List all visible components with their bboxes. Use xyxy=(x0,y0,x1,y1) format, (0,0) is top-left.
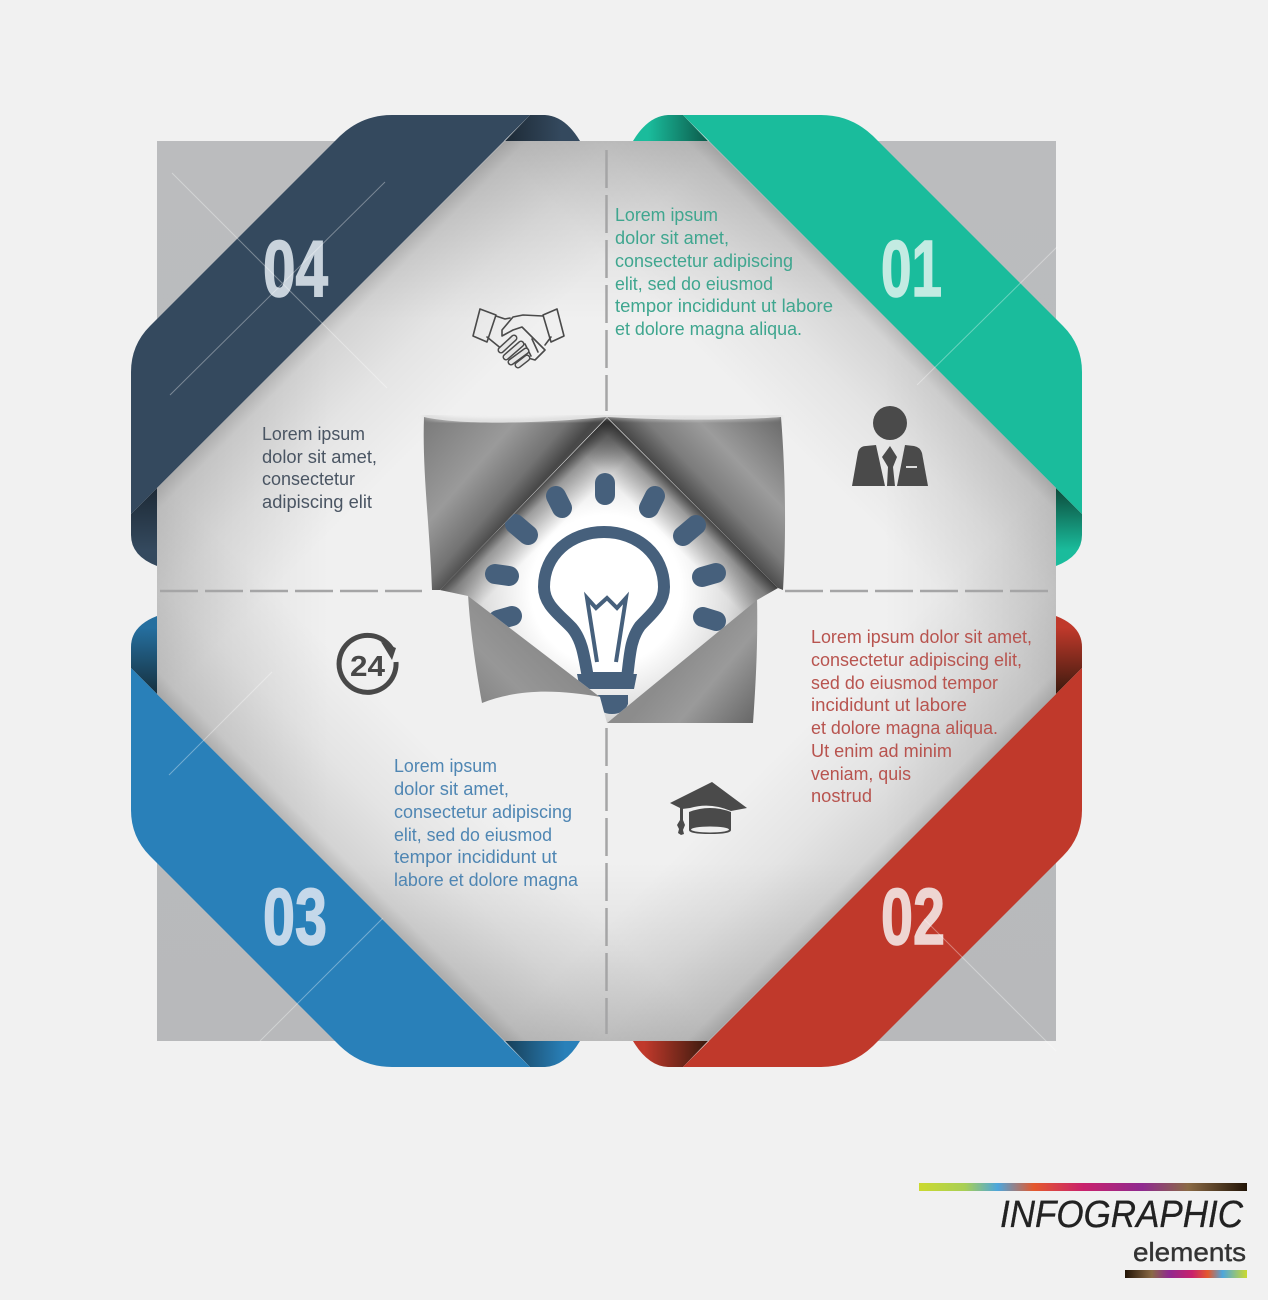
grey square backing xyxy=(157,141,1056,1041)
text block 03 blue: Lorem ipsum xyxy=(394,756,497,776)
ribbon 01 teal xyxy=(633,115,1082,566)
torn flap bottom right xyxy=(607,596,757,723)
icon: 24 hour clock xyxy=(339,635,396,692)
torn flap bottom left xyxy=(468,594,600,703)
dashed dividers xyxy=(160,150,1048,1034)
text block 02 red: nostrud xyxy=(811,786,872,806)
text block 01 teal: consectetur adipiscing xyxy=(615,251,793,271)
torn flap top right xyxy=(607,417,785,590)
text block 02 red: incididunt ut labore xyxy=(811,695,967,715)
text block 01 teal: elit, sed do eiusmod xyxy=(615,274,773,294)
subtitle elements: elements xyxy=(1133,1237,1246,1267)
faint diagonal hairlines xyxy=(169,173,1057,1051)
icon: handshake xyxy=(473,309,564,365)
text block 01 teal: et dolore magna aliqua. xyxy=(615,319,802,339)
text block 02 red: sed do eiusmod tempor xyxy=(811,673,998,693)
ribbon 02 red xyxy=(633,616,1082,1067)
ribbon 03 blue xyxy=(131,616,580,1067)
infographic canvas xyxy=(131,115,1247,1278)
text block 03 blue: consectetur adipiscing xyxy=(394,802,572,822)
icon: 24 hour clock: 24 xyxy=(350,651,385,683)
text block 03 blue: labore et dolore magna xyxy=(394,870,579,890)
text block 04 navy: Lorem ipsum xyxy=(262,424,365,444)
icon: graduation cap xyxy=(670,782,747,835)
central torn hole with light bulb xyxy=(424,410,790,730)
gradient bar bottom xyxy=(1125,1270,1247,1278)
ribbon 04 navy xyxy=(131,115,580,566)
icon: businessman xyxy=(852,406,928,486)
inner diamond xyxy=(440,418,778,723)
number 02: 02 xyxy=(881,872,945,961)
text block 04 navy: consectetur xyxy=(262,469,355,489)
text block 02 red: consectetur adipiscing elit, xyxy=(811,650,1022,670)
text block 02 red: Lorem ipsum dolor sit amet, xyxy=(811,627,1032,647)
number 03: 03 xyxy=(263,872,327,961)
text block 01 teal: dolor sit amet, xyxy=(615,228,729,248)
title INFOGRAPHIC: INFOGRAPHIC xyxy=(1000,1194,1244,1236)
text block 03 blue: dolor sit amet, xyxy=(394,779,509,799)
text block 04 navy: adipiscing elit xyxy=(262,492,372,512)
text block 04 navy: dolor sit amet, xyxy=(262,447,377,467)
text block 04 navy xyxy=(262,424,377,512)
gradient bar top xyxy=(919,1183,1247,1191)
text block 02 red: Ut enim ad minim xyxy=(811,741,952,761)
text block 02 red: et dolore magna aliqua. xyxy=(811,718,998,738)
title block bottom right xyxy=(919,1183,1247,1278)
text block 01 teal: tempor incididunt ut labore xyxy=(615,296,833,316)
text block 01 teal: Lorem ipsum xyxy=(615,205,718,225)
text block 03 blue xyxy=(394,756,579,890)
text block 03 blue: elit, sed do eiusmod xyxy=(394,825,552,845)
text block 02 red xyxy=(811,627,1032,806)
light bulb icon xyxy=(495,483,716,714)
text block 02 red: veniam, quis xyxy=(811,764,911,784)
text block 03 blue: tempor incididunt ut xyxy=(394,847,557,867)
number 01: 01 xyxy=(881,224,942,313)
central paper panel with folded shadows xyxy=(157,141,1056,1041)
number 04: 04 xyxy=(263,224,328,313)
paper curl highlight xyxy=(424,416,781,422)
text block 01 teal xyxy=(615,205,833,339)
torn flap top left xyxy=(424,417,607,590)
